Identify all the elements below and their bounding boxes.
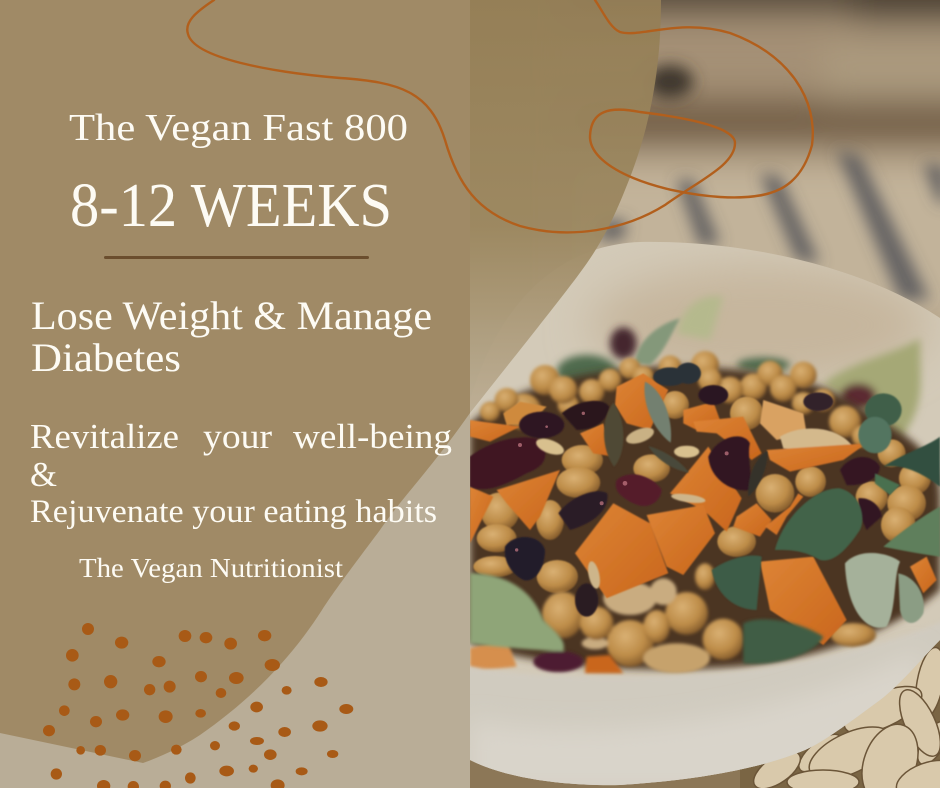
salad (470, 296, 940, 673)
tan blob shape: left part (0, 0, 470, 763)
subheading: Lose Weight & Manage (31, 293, 432, 338)
green leaves (712, 393, 940, 628)
dark food bed (470, 367, 940, 669)
body text: Rejuvenate your eating habits (30, 494, 437, 530)
photo: vegan salad bowl (460, 0, 940, 788)
white bowl (470, 230, 940, 788)
orange dots (43, 623, 353, 788)
cranberries (470, 363, 882, 617)
body text: Revitalize (30, 417, 179, 456)
author credit: The Vegan Nutritionist (79, 553, 344, 583)
background panel (0, 0, 470, 788)
cranberry shine (515, 412, 729, 552)
body text: & (30, 455, 57, 494)
near blurred orange (470, 644, 518, 671)
subheading: Diabetes (31, 335, 181, 380)
bowl front rim (470, 634, 940, 786)
duration heading: 8-12 WEEKS (70, 172, 392, 240)
body text (30, 417, 452, 530)
pumpkin seeds (534, 382, 767, 590)
body text: your (203, 417, 272, 456)
sweet potato cubes (470, 373, 937, 645)
wicker placemat (470, 640, 940, 788)
body text: well-being (293, 417, 452, 456)
title: The Vegan Fast 800 (69, 107, 408, 149)
back leaves (557, 296, 921, 440)
divider (104, 256, 369, 259)
tan blob shape: right translucent part (470, 0, 661, 413)
decorative curved line (187, 0, 813, 232)
near blurred greens (470, 573, 823, 672)
blurred table backdrop (600, 0, 940, 307)
leaf top blurred (635, 318, 680, 365)
subheading (31, 293, 432, 380)
chickpeas (473, 351, 931, 673)
